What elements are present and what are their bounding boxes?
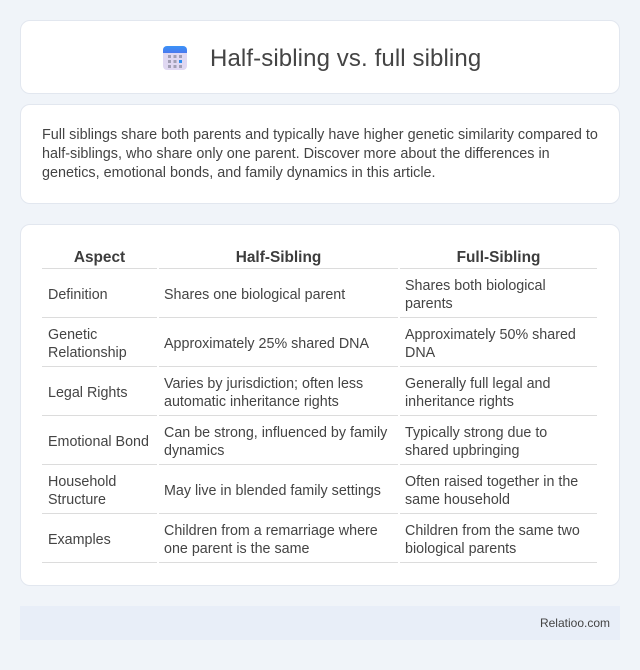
footer credit: Relatioo.com [540, 616, 610, 630]
row: Emotional Bond [48, 425, 547, 459]
row: Household Structure: Structure [48, 492, 106, 508]
intro text: Full siblings share both parents and typically have higher genetic similarity compared to [42, 127, 598, 143]
row: Household Structure [48, 474, 578, 508]
row: Definition: Shares one biological parent [164, 287, 345, 303]
intro text: half-siblings, who share only one parent. Discover more about the differences in [42, 146, 550, 162]
icon: calendar [163, 46, 187, 70]
row: Legal Rights [48, 376, 550, 410]
row: Examples: one parent is the same [164, 541, 309, 557]
row: Household Structure: same household [405, 492, 510, 508]
row: Genetic Relationship [48, 327, 576, 361]
table header: Half-Sibling: Half-Sibling [236, 249, 321, 266]
row: Legal Rights: Generally full legal and [405, 376, 550, 392]
row: Examples: biological parents [405, 541, 516, 557]
row: Legal Rights: Legal Rights [48, 385, 127, 401]
table header: Full-Sibling: Full-Sibling [457, 249, 540, 266]
row: Genetic Relationship: Relationship [48, 345, 127, 361]
panel: comparison table [20, 224, 620, 586]
row: Genetic Relationship: Approximately 50% shared [405, 327, 576, 343]
row: Genetic Relationship: DNA [405, 345, 435, 361]
row: Definition [48, 278, 546, 312]
row: Examples [48, 523, 580, 557]
intro text [42, 127, 598, 181]
row: Household Structure: Household [48, 474, 116, 490]
row: Household Structure: Often raised together in the [405, 474, 578, 490]
title: Half-sibling vs. full sibling [210, 45, 481, 72]
row: Emotional Bond: Can be strong, influenced by family [164, 425, 387, 441]
row: Genetic Relationship: Approximately 25% shared DNA [164, 336, 369, 352]
table header: Aspect: Aspect [74, 249, 125, 266]
row: Genetic Relationship: Genetic [48, 327, 97, 343]
intro text: genetics, emotional bonds, and family dynamics in this article. [42, 165, 436, 181]
row: Legal Rights: automatic inheritance rights [164, 394, 339, 410]
panel: title card [20, 20, 620, 94]
row: Household Structure: May live in blended family settings [164, 483, 381, 499]
row: Emotional Bond: Emotional Bond [48, 434, 149, 450]
row: Examples: Children from the same two [405, 523, 580, 539]
row: Legal Rights: inheritance rights [405, 394, 514, 410]
row: Definition: Shares both biological [405, 278, 546, 294]
panel: introduction [20, 104, 620, 204]
row: Definition: Definition [48, 287, 108, 303]
row: Emotional Bond: dynamics [164, 443, 224, 459]
row: Emotional Bond: Typically strong due to [405, 425, 547, 441]
row: Examples: Children from a remarriage where [164, 523, 378, 539]
row: Definition: parents [405, 296, 453, 312]
row: Examples: Examples [48, 532, 111, 548]
footer bar [20, 606, 620, 640]
row: Legal Rights: Varies by jurisdiction; often less [164, 376, 363, 392]
row: Emotional Bond: shared upbringing [405, 443, 519, 459]
